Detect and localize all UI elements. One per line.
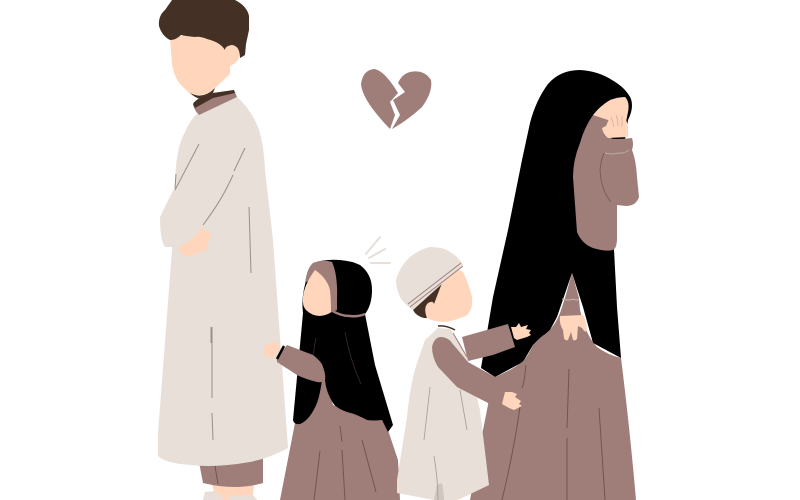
shock lines above girl xyxy=(366,237,390,263)
father collar xyxy=(190,88,237,115)
girl black hijab xyxy=(293,260,393,432)
boy face xyxy=(425,268,472,322)
boy back arm xyxy=(462,324,515,361)
boy robe xyxy=(397,326,489,500)
father hair xyxy=(159,0,249,58)
father robe xyxy=(158,97,288,466)
girl hood lining xyxy=(305,261,337,313)
boy back hand xyxy=(511,323,531,340)
father trousers xyxy=(199,458,263,487)
father feet and shoes xyxy=(203,484,257,500)
father hand xyxy=(178,227,212,257)
girl face xyxy=(303,270,331,316)
figure: mother xyxy=(470,70,639,500)
boy front hand xyxy=(502,392,522,410)
mother hand on belly xyxy=(560,315,587,340)
father face xyxy=(170,30,240,95)
girl dress xyxy=(280,375,400,500)
girl arm xyxy=(277,345,325,382)
mother black veil xyxy=(481,70,632,377)
figure: girl xyxy=(263,260,400,500)
mother face xyxy=(593,97,629,122)
boy front arm xyxy=(432,337,512,405)
mother dress xyxy=(470,273,636,500)
figure: boy xyxy=(396,247,531,500)
boy cap xyxy=(396,247,463,310)
mother inner veil xyxy=(573,115,617,251)
girl hand xyxy=(263,340,280,358)
icon: broken heart xyxy=(361,69,431,129)
mother hand on face xyxy=(602,114,628,138)
girl chin strap xyxy=(331,310,365,316)
mother sleeve xyxy=(600,138,639,206)
boy hair xyxy=(413,280,445,318)
figure: father xyxy=(158,0,288,500)
